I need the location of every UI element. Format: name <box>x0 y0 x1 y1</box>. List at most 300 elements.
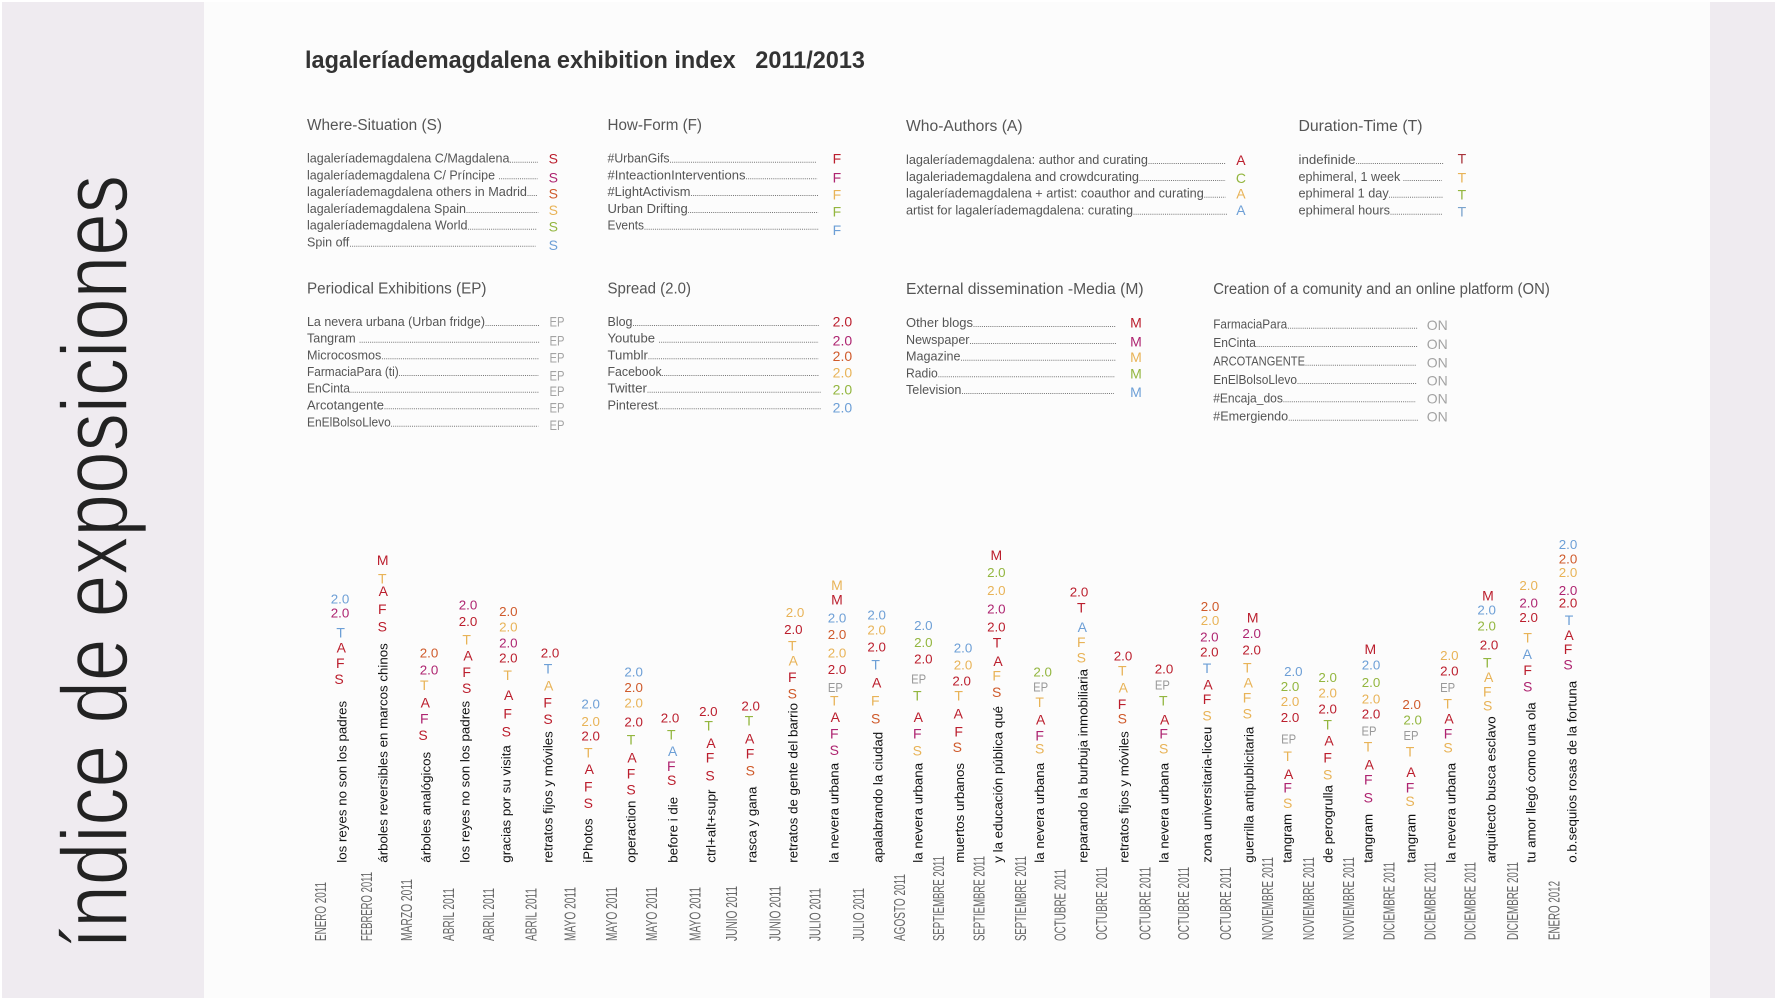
legend rows: online: ON <box>1427 391 1448 407</box>
heading: online: Creation of a comunity and an online platform (ON) <box>1213 281 1550 298</box>
legend rows: periodical <box>307 314 564 433</box>
tag stack: EP <box>1033 680 1048 695</box>
date: ABRIL 2011 <box>441 888 458 941</box>
tag stack: A <box>1444 711 1454 727</box>
column 31 <box>1546 537 1579 940</box>
tag stack: T <box>378 570 387 586</box>
tag stack: 2.0 <box>954 658 972 673</box>
exhibition name: la nevera urbana <box>910 762 925 863</box>
tag stack: A <box>831 709 841 725</box>
tag stack: T <box>1203 660 1212 676</box>
exhibition name: iPhotos <box>580 818 595 863</box>
tag stack: 2.0 <box>987 620 1006 635</box>
exhibition name: gracias por su visita <box>499 745 514 863</box>
tag stack: A <box>1078 619 1088 635</box>
tag stack <box>1281 664 1303 811</box>
tag stack: A <box>1365 756 1375 772</box>
panel: duration-time <box>1298 118 1467 220</box>
tag stack: EP <box>828 680 843 695</box>
legend rows: periodical: La nevera urbana (Urban fridge) <box>307 315 485 329</box>
legend rows: who: lagaleríademagdalena: author and curating <box>906 153 1148 167</box>
column 23 <box>1218 610 1261 940</box>
date: NOVIEMBRE 2011 <box>1301 857 1318 940</box>
heading: periodical: Periodical Exhibitions (EP) <box>307 280 486 297</box>
legend rows: where: lagaleríademagdalena World <box>307 219 468 233</box>
tag stack: S <box>788 686 797 702</box>
tag stack: 2.0 <box>1362 675 1380 690</box>
legend rows: periodical: EP <box>550 333 564 349</box>
exhibition name: tangram <box>1280 814 1295 863</box>
tag stack: A <box>1484 669 1494 685</box>
tag stack: F <box>627 766 635 782</box>
exhibition name: apalabrando la ciudad <box>870 732 885 863</box>
tag stack: 2.0 <box>828 646 846 661</box>
tag stack: 2.0 <box>828 627 846 642</box>
legend rows: who: lagaleriademagdalena and crowdcurating <box>906 170 1139 184</box>
column 18 <box>1013 664 1052 941</box>
tag stack: T <box>1323 716 1332 732</box>
tag stack <box>1318 670 1337 782</box>
date: DICIEMBRE 2011 <box>1462 862 1480 940</box>
legend rows: where: S <box>549 150 558 166</box>
legend rows: media: Television <box>906 383 961 397</box>
tag stack: F <box>667 758 676 774</box>
legend rows: how: F <box>833 186 841 202</box>
tag stack: S <box>1118 711 1127 727</box>
tag stack: F <box>1564 641 1572 657</box>
exhibition name: arquitecto busca esclavo <box>1484 716 1499 863</box>
legend rows: duration: ephimeral 1 day <box>1298 187 1389 201</box>
tag stack: 2.0 <box>1155 662 1173 677</box>
tag stack: 2.0 <box>1070 585 1088 600</box>
tag stack: 2.0 <box>1519 610 1538 625</box>
legend rows: online: ON <box>1427 354 1448 370</box>
tag stack: T <box>788 638 797 654</box>
column 7 <box>562 697 600 941</box>
tag stack: T <box>667 726 676 742</box>
tag stack <box>1033 664 1052 757</box>
tag stack: 2.0 <box>624 664 643 679</box>
tag stack: 2.0 <box>1559 596 1577 611</box>
tag stack: S <box>1077 649 1086 665</box>
tag stack <box>377 552 389 635</box>
tag stack: 2.0 <box>741 699 760 714</box>
exhibition name: retratos fijos y móviles <box>1116 731 1131 863</box>
legend rows: where <box>307 150 558 253</box>
tag stack: A <box>954 706 964 722</box>
tag stack: F <box>1283 780 1292 796</box>
legend rows: periodical: FarmaciaPara (ti) <box>307 365 399 379</box>
tag stack: 2.0 <box>1318 701 1337 716</box>
column 24 <box>1260 664 1303 940</box>
main heading: lagaleríademagdalena exhibition index 2011/2013 <box>305 47 865 74</box>
tag stack: T <box>871 656 880 672</box>
tag stack: 2.0 <box>499 651 518 666</box>
tag stack: F <box>830 726 839 742</box>
tag stack: A <box>745 730 755 746</box>
column 27 <box>1382 697 1422 940</box>
tag stack: 2.0 <box>1519 596 1538 611</box>
tag stack: T <box>627 731 636 747</box>
exhibition name: árboles analógicos <box>419 751 434 863</box>
tag stack: S <box>378 619 387 635</box>
tag stack: S <box>705 768 715 784</box>
tag stack: S <box>913 742 922 758</box>
column 9 <box>644 711 680 941</box>
tag stack: T <box>1035 694 1044 710</box>
column 2 <box>359 552 390 941</box>
tag stack: A <box>1564 627 1574 643</box>
tag stack <box>459 597 477 696</box>
legend rows: duration: T <box>1458 186 1467 202</box>
exhibition name: la nevera urbana <box>826 762 841 863</box>
column 29 <box>1462 588 1499 940</box>
panel: periodical exhibitions <box>307 280 564 433</box>
exhibition name: ctrl+alt+supr <box>704 789 719 863</box>
tag stack <box>1519 578 1538 694</box>
legend rows: how: F <box>833 222 841 238</box>
tag stack: 2.0 <box>420 663 438 678</box>
tag stack <box>952 641 972 755</box>
tag stack: F <box>543 694 552 710</box>
exhibition name: muertos urbanos <box>952 763 967 863</box>
tag stack: S <box>543 711 553 727</box>
legend rows: where: S <box>549 169 558 185</box>
legend rows: spread: 2.0 <box>833 400 852 416</box>
tag stack <box>784 605 804 702</box>
legend rows: who: A <box>1236 185 1246 201</box>
tag stack: EP <box>1361 723 1377 738</box>
legend rows: duration: indefinide <box>1298 153 1356 167</box>
tag stack: 2.0 <box>581 697 600 712</box>
tag stack <box>661 711 679 788</box>
legend rows: periodical: EP <box>550 349 564 365</box>
tag stack: 2.0 <box>867 640 886 655</box>
tag stack: 2.0 <box>499 636 518 651</box>
legend rows: who: C <box>1236 170 1246 186</box>
legend rows: who: A <box>1236 202 1246 218</box>
date: MAYO 2011 <box>604 887 621 941</box>
tag stack: F <box>462 664 471 680</box>
legend rows: online: ON <box>1427 317 1448 333</box>
tag stack <box>581 697 600 811</box>
column 13 <box>808 577 846 941</box>
tag stack <box>1361 641 1380 806</box>
tag stack: F <box>1444 725 1452 741</box>
legend rows: where: Spin off <box>307 236 350 250</box>
tag stack <box>1070 585 1088 665</box>
tag stack: 2.0 <box>420 646 438 661</box>
tag stack: EP <box>1403 728 1419 743</box>
tag stack: F <box>1323 750 1332 766</box>
legend rows: spread: Twitter <box>608 382 647 396</box>
tag stack: S <box>334 671 344 687</box>
tag stack: A <box>627 750 637 766</box>
exhibition name: before i die <box>665 797 680 863</box>
legend rows: online: FarmaciaPara <box>1213 318 1287 332</box>
legend rows: how: Events <box>608 219 644 233</box>
tag stack: A <box>668 743 678 759</box>
panel: how-form <box>608 117 841 238</box>
tag stack: 2.0 <box>581 729 600 744</box>
date: MAYO 2011 <box>644 887 661 941</box>
legend rows: where: lagaleríademagdalena C/ Príncipe <box>307 168 495 182</box>
heading: how: How-Form (F) <box>608 117 702 134</box>
legend rows: spread: Pinterest <box>608 398 658 412</box>
legend rows: where: lagaleríademagdalena others in Madrid <box>307 185 527 199</box>
tag stack: 2.0 <box>1201 613 1219 628</box>
tag stack: F <box>992 667 1001 683</box>
column 12 <box>768 605 804 941</box>
tag stack: 2.0 <box>1318 686 1337 701</box>
tag stack: F <box>503 705 512 721</box>
tag stack: F <box>746 745 754 761</box>
legend rows: media: M <box>1130 334 1142 350</box>
tag stack: T <box>1159 692 1168 708</box>
tag stack: F <box>1077 634 1086 650</box>
tag stack: 2.0 <box>1284 664 1303 679</box>
heading: duration: Duration-Time (T) <box>1298 118 1422 135</box>
tag stack: S <box>1035 741 1044 757</box>
tag stack: 2.0 <box>914 618 933 633</box>
legend rows: duration: ephimeral, 1 week <box>1298 170 1401 184</box>
tag stack: 2.0 <box>661 711 679 726</box>
tag stack: 2.0 <box>1242 626 1261 641</box>
tag stack: 2.0 <box>1559 537 1577 552</box>
exhibition name: zona universitaria-liceu <box>1200 727 1215 863</box>
tag stack: 2.0 <box>1477 619 1496 634</box>
tag stack: 2.0 <box>1559 565 1577 580</box>
legend rows: duration: T <box>1458 204 1467 220</box>
legend rows: spread: 2.0 <box>833 314 852 330</box>
tag stack: A <box>993 653 1003 669</box>
tag stack: 2.0 <box>1114 649 1132 664</box>
tag stack: 2.0 <box>1200 644 1219 659</box>
tag stack: S <box>1523 678 1532 694</box>
legend rows: spread: 2.0 <box>833 333 852 349</box>
tag stack: 2.0 <box>1281 694 1299 709</box>
tag stack: M <box>831 577 843 593</box>
legend rows: media <box>906 315 1142 400</box>
tag stack: 2.0 <box>499 620 518 635</box>
legend rows: online: EnCinta <box>1213 336 1256 350</box>
date: JUNIO 2011 <box>768 886 784 941</box>
tag stack: T <box>462 631 471 647</box>
tag stack: T <box>1443 695 1452 711</box>
tag stack: 2.0 <box>867 608 886 623</box>
legend rows: online: #Encaja_dos <box>1213 391 1283 405</box>
tag stack: S <box>871 711 880 727</box>
tag stack: A <box>1203 676 1213 692</box>
column 4 <box>441 597 477 941</box>
tag stack: T <box>954 688 963 704</box>
tag stack: S <box>418 727 428 743</box>
tag stack: S <box>830 742 839 758</box>
tag stack: S <box>953 739 962 755</box>
tag stack <box>1155 662 1173 756</box>
legend rows: online: #Emergiendo <box>1213 410 1288 424</box>
column 1 <box>313 591 350 941</box>
date: AGOSTO 2011 <box>892 874 909 941</box>
tag stack: A <box>1406 764 1416 780</box>
panel: external dissemination <box>906 281 1144 400</box>
tag stack <box>867 608 886 727</box>
tag stack: 2.0 <box>1362 692 1380 707</box>
exhibition name: tu amor llegó como una ola <box>1524 702 1539 863</box>
tag stack: 2.0 <box>624 715 643 730</box>
legend rows: spread: Facebook <box>608 365 662 379</box>
tag stack: 2.0 <box>459 597 477 612</box>
tag stack <box>1477 588 1498 713</box>
legend rows: how: Urban Drifting <box>608 202 688 216</box>
tag stack: 2.0 <box>828 610 846 625</box>
legend rows: media: Magazine <box>906 350 961 364</box>
column 25 <box>1301 670 1337 940</box>
tag stack: S <box>1243 706 1252 722</box>
tag stack: 2.0 <box>1318 670 1337 685</box>
legend rows: online: EnElBolsoLlevo <box>1213 373 1297 387</box>
legend rows: media: M <box>1130 366 1142 382</box>
tag stack <box>624 664 643 798</box>
tag stack: T <box>830 693 839 709</box>
legend rows: online: ON <box>1427 409 1448 425</box>
tag stack: 2.0 <box>1480 638 1498 653</box>
column 5 <box>481 604 518 941</box>
tag stack: M <box>1247 610 1258 626</box>
legend rows: online: ON <box>1427 373 1448 389</box>
tag stack: 2.0 <box>624 695 643 710</box>
tag stack: T <box>1118 663 1127 679</box>
column 8 <box>604 664 643 941</box>
tag stack: S <box>462 680 471 696</box>
tag stack: F <box>1243 689 1251 705</box>
tag stack: 2.0 <box>987 583 1006 598</box>
tag stack: M <box>1365 641 1376 657</box>
legend rows: online: ON <box>1427 336 1448 352</box>
heading: who: Who-Authors (A) <box>906 118 1023 135</box>
tag stack: T <box>745 713 754 729</box>
tag stack: T <box>1483 654 1492 670</box>
tag stack: 2.0 <box>1440 664 1459 679</box>
tag stack: 2.0 <box>1402 697 1421 712</box>
tag stack <box>828 577 846 758</box>
tag stack: EP <box>911 671 926 686</box>
tag stack: T <box>704 718 713 734</box>
tag stack <box>1200 599 1219 723</box>
tag stack <box>331 591 349 687</box>
tag stack: F <box>1203 691 1211 707</box>
legend rows: media: M <box>1130 315 1142 331</box>
tag stack: 2.0 <box>624 680 643 695</box>
tag stack: M <box>991 547 1002 563</box>
tag stack: 2.0 <box>699 704 718 719</box>
tag stack: 2.0 <box>1200 630 1219 645</box>
legend rows: online <box>1213 317 1448 425</box>
legend rows: periodical: EnElBolsoLlevo <box>307 416 391 430</box>
tag stack <box>1114 649 1132 727</box>
tag stack <box>1440 648 1459 756</box>
tag stack: 2.0 <box>954 641 972 656</box>
tag stack: S <box>746 763 755 779</box>
tag stack: F <box>1364 772 1373 788</box>
legend rows: media: M <box>1130 349 1142 365</box>
legend rows: periodical: EP <box>550 383 564 399</box>
legend rows: media: Other blogs <box>906 316 973 330</box>
tag stack: A <box>585 761 595 777</box>
tag stack: T <box>1243 659 1252 675</box>
date: JULIO 2011 <box>808 888 824 941</box>
date: SEPTIEMBRE 2011 <box>1013 856 1030 941</box>
exhibition name: retratos fijos y móviles <box>540 731 555 863</box>
tag stack: A <box>789 653 799 669</box>
tag stack: 2.0 <box>828 662 846 677</box>
tag stack: 2.0 <box>1281 710 1299 725</box>
tag stack <box>1242 610 1261 722</box>
chart: exhibition timeline <box>313 537 1579 941</box>
column 22 <box>1176 599 1219 940</box>
date: OCTUBRE 2011 <box>1138 867 1154 940</box>
legend rows: periodical: EP <box>550 314 564 330</box>
tag stack: 2.0 <box>987 601 1006 616</box>
date: ABRIL 2011 <box>481 888 498 941</box>
tag stack: F <box>1483 683 1492 699</box>
tag stack: 2.0 <box>914 651 933 666</box>
tag stack: A <box>463 648 473 664</box>
tag stack: S <box>1443 740 1453 756</box>
exhibition name: la nevera urbana <box>1032 762 1047 863</box>
tag stack: A <box>1284 766 1294 782</box>
tag stack: 2.0 <box>1440 648 1459 663</box>
legend rows: how <box>608 150 841 238</box>
tag stack: 2.0 <box>541 646 559 661</box>
column 14 <box>851 608 886 941</box>
legend rows: spread: Youtube <box>608 332 655 346</box>
exhibition name: retratos de gente del barrio <box>785 703 800 863</box>
tag stack: 2.0 <box>1559 583 1577 598</box>
exhibition name: la nevera urbana <box>1444 762 1459 863</box>
column 16 <box>931 641 972 941</box>
tag stack: F <box>788 669 797 685</box>
tag stack: T <box>1406 744 1415 760</box>
tag stack <box>911 618 933 758</box>
tag stack: 2.0 <box>1242 642 1261 657</box>
column 19 <box>1052 585 1090 941</box>
tag stack: S <box>1563 656 1573 672</box>
heading: media: External dissemination -Media (M) <box>906 281 1144 298</box>
tag stack: A <box>1036 711 1046 727</box>
legend rows: where: lagaleríademagdalena Spain <box>307 202 466 216</box>
tag stack: M <box>1482 588 1494 604</box>
legend rows: duration: T <box>1458 150 1467 166</box>
tag stack: 2.0 <box>499 604 518 619</box>
tag stack: A <box>421 694 431 710</box>
column 3 <box>399 646 438 941</box>
tag stack: 2.0 <box>1362 707 1380 722</box>
tag stack: A <box>1160 711 1170 727</box>
legend rows: periodical: EnCinta <box>307 382 350 396</box>
tag stack: 2.0 <box>1519 578 1538 593</box>
tag stack: S <box>1323 766 1332 782</box>
exhibition name: los reyes no son los padres <box>335 700 350 863</box>
legend rows: periodical: EP <box>550 368 564 384</box>
column 10 <box>688 704 719 941</box>
legend rows: where: lagaleríademagdalena C/Magdalena <box>307 152 510 166</box>
legend rows: online: ARCOTANGENTE <box>1213 355 1305 369</box>
tag stack: F <box>336 655 345 671</box>
tag stack: F <box>1118 696 1126 712</box>
tag stack: 2.0 <box>581 714 600 729</box>
tag stack <box>1402 697 1422 809</box>
